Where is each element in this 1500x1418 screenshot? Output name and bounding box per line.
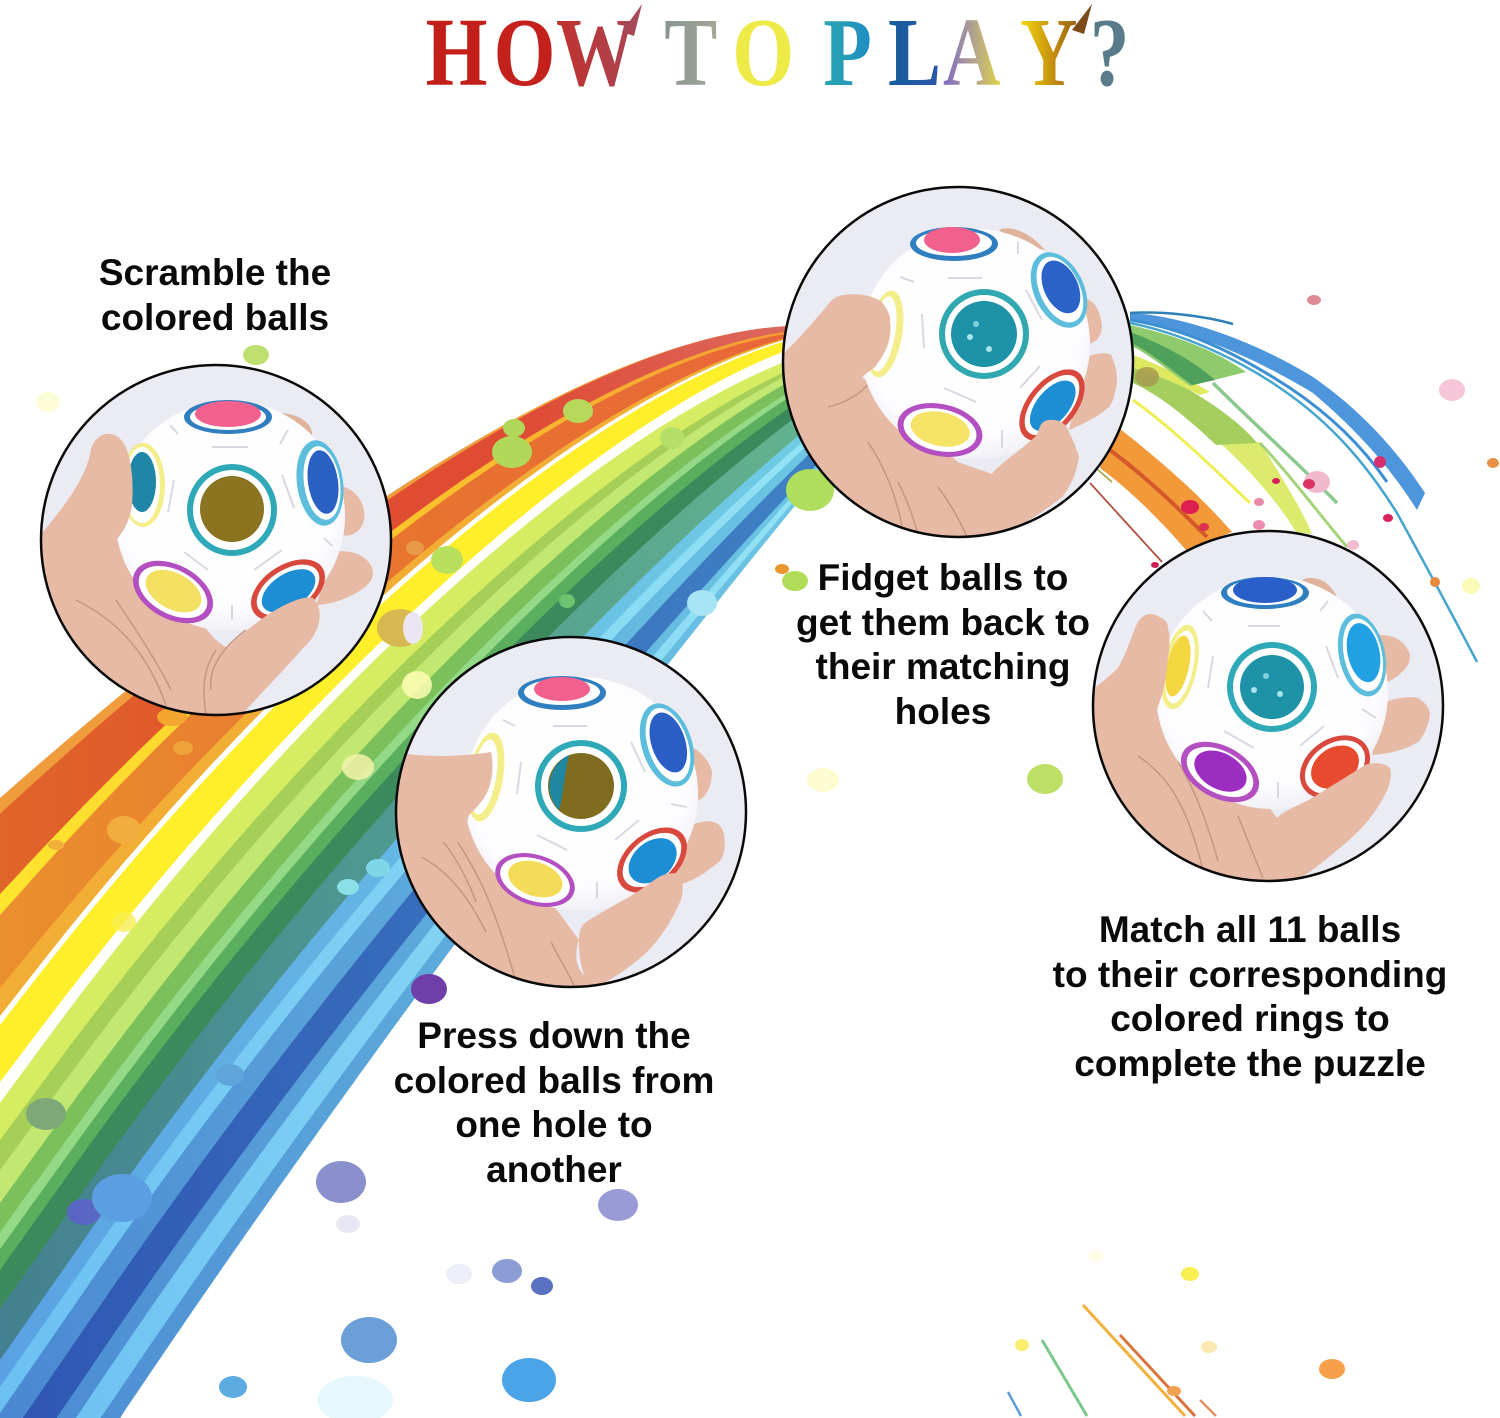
caption: step 4: colored rings to [1110, 998, 1390, 1039]
photo: step 4 solved puzzle [1088, 530, 1444, 886]
colored dots [26, 295, 1499, 1418]
rainbow: left arc [0, 326, 845, 1418]
title: T [664, 0, 717, 107]
title [426, 0, 1130, 107]
caption: step 3 [796, 557, 1090, 732]
title: L [888, 0, 941, 107]
caption: step 1: Scramble the [99, 252, 331, 293]
caption: step 1: colored balls [101, 297, 329, 338]
title: O [732, 0, 814, 107]
title: A [943, 0, 1000, 107]
rainbow: right fading arc [1090, 313, 1477, 662]
caption: step 3: get them back to [796, 602, 1090, 643]
caption: step 2: colored balls from [394, 1060, 714, 1101]
caption: step 2 [394, 1015, 714, 1190]
caption: step 4: complete the puzzle [1074, 1043, 1426, 1084]
bottom right accent lines [1008, 1305, 1216, 1416]
title: H [426, 0, 487, 107]
caption: step 4: to their corresponding [1053, 954, 1447, 995]
caption: step 4 [1053, 909, 1447, 1084]
title: ? [1090, 0, 1130, 107]
caption: step 1 [99, 252, 331, 338]
photo: step 1 hand scrambling ball [36, 364, 392, 720]
title: W [556, 0, 654, 107]
caption: step 2: another [486, 1149, 622, 1190]
caption: step 3: Fidget balls to [818, 557, 1068, 598]
caption: step 3: holes [895, 691, 991, 732]
photo: step 2 thumb pressing ball [391, 636, 747, 992]
caption: step 2: Press down the [417, 1015, 691, 1056]
title: Y [1020, 0, 1078, 107]
title: O [494, 0, 555, 107]
photo: step 3 fidgeting balls [778, 186, 1134, 542]
title: P [823, 0, 872, 107]
caption: step 4: Match all 11 balls [1099, 909, 1401, 950]
caption: step 3: their matching [816, 646, 1070, 687]
caption: step 2: one hole to [455, 1104, 653, 1145]
